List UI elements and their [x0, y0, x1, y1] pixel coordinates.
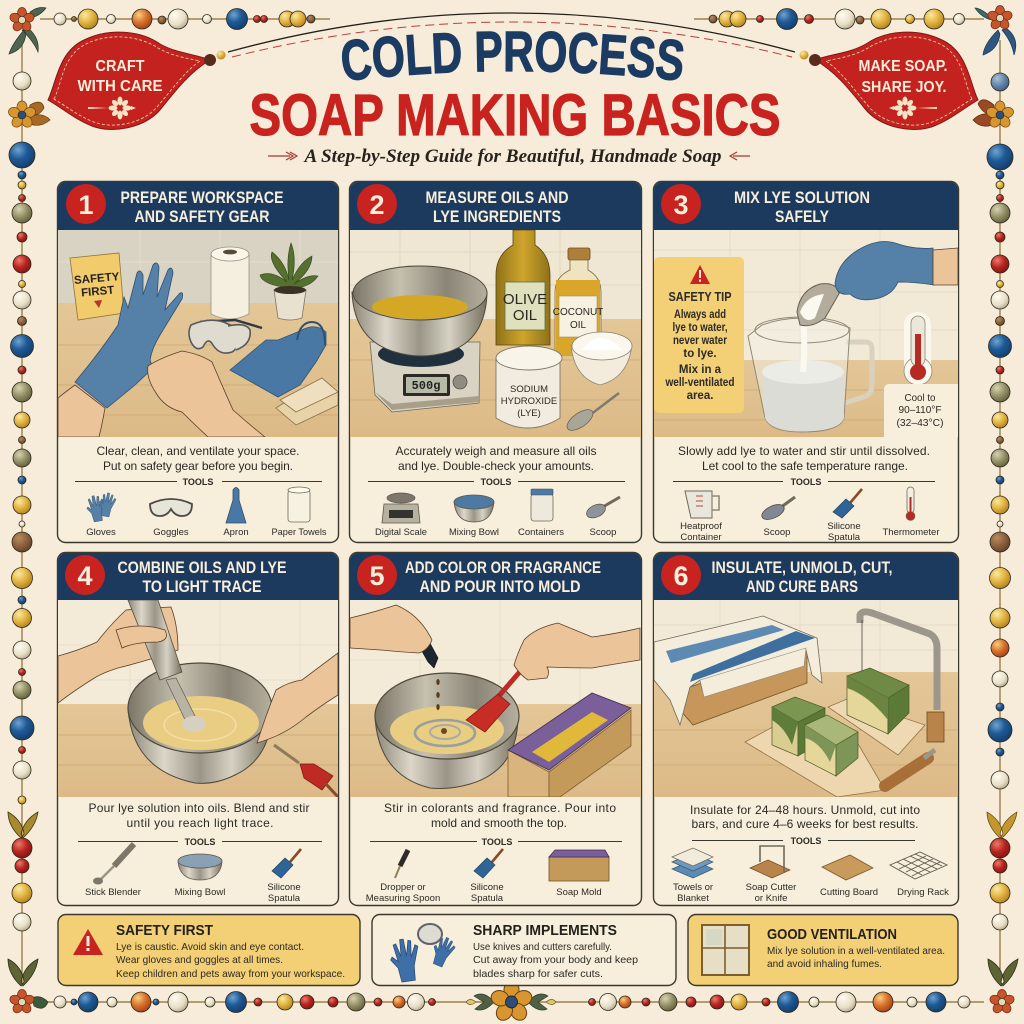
left hand	[350, 605, 432, 653]
border: left beads	[9, 40, 35, 985]
header 6	[654, 553, 958, 600]
header 1: PREPARE WORKSPACE	[120, 188, 284, 207]
header 4: 4	[77, 561, 93, 591]
apron	[230, 322, 326, 397]
olive oil bottle: OIL	[513, 307, 537, 324]
yellow safety tip box: Mix in a	[679, 364, 722, 376]
tool labels 2: Containers	[518, 527, 564, 538]
header 6: 6	[673, 561, 689, 591]
header 3: 3	[673, 190, 689, 220]
soap mold	[508, 693, 631, 797]
gloved hand	[75, 263, 183, 408]
stick blender	[128, 600, 206, 732]
tools heading 6: TOOLS	[791, 836, 821, 846]
steel bowl	[375, 673, 519, 788]
caption 4: Pour lye solution into oils. Blend and stir	[88, 801, 310, 815]
wooden box	[654, 647, 807, 725]
safety first sign: FIRST	[81, 285, 115, 299]
tool labels 2: Scoop	[590, 527, 616, 538]
banner: make soap share joy: MAKE SOAP.	[858, 58, 948, 75]
tool labels 2	[375, 527, 616, 538]
cutter base	[828, 699, 925, 755]
banner: craft with care	[48, 32, 226, 129]
tool labels 6: Drying Rack	[897, 887, 949, 898]
tools heading 1: TOOLS	[183, 477, 213, 487]
header 5: 5	[369, 561, 385, 591]
panel 5: add color	[350, 552, 642, 906]
header 3: SAFELY	[775, 207, 830, 226]
tool labels 2: Mixing Bowl	[449, 527, 499, 538]
window icon	[702, 925, 749, 975]
large soap bar	[847, 668, 909, 734]
caption 2: Accurately weigh and measure all oils	[396, 444, 596, 458]
illustration 5	[350, 600, 641, 797]
caption 1: Clear, clean, and ventilate your space.	[96, 444, 300, 458]
lye beaker: (LYE)	[517, 408, 541, 419]
warning text	[86, 922, 345, 980]
tool labels 3: Container	[680, 532, 722, 543]
plant	[260, 243, 318, 320]
tool labels 4: Silicone	[267, 882, 301, 893]
caption 5	[384, 801, 616, 830]
caption 4: until you reach light trace.	[126, 816, 274, 830]
measuring jug	[748, 317, 872, 432]
cutter arm	[860, 612, 944, 742]
yellow safety tip box: never water	[673, 335, 727, 347]
tool labels 2: Digital Scale	[375, 527, 427, 538]
illustration 4	[58, 600, 338, 797]
red spatula	[274, 745, 338, 797]
caption 2	[396, 444, 596, 473]
title: SOAP MAKING BASICS	[250, 83, 780, 148]
soap bar 3	[805, 715, 858, 776]
cutter icon	[750, 846, 790, 878]
soap mold icon	[549, 850, 609, 881]
forearm	[933, 248, 958, 285]
towels icon	[672, 848, 713, 878]
safety first sign	[70, 253, 124, 320]
tool labels 1: Paper Towels	[272, 527, 327, 538]
tool labels 1: Goggles	[153, 527, 189, 538]
caption 2: and lye. Double-check your amounts.	[398, 459, 594, 473]
panel 6: insulate	[654, 552, 958, 906]
yellow safety tip box	[654, 257, 744, 413]
goggles	[189, 320, 262, 353]
tool labels 4	[85, 882, 301, 904]
panel 2: measure oils	[350, 182, 642, 542]
warning triangle	[73, 929, 103, 955]
header 4	[58, 553, 338, 600]
drops	[436, 679, 440, 710]
header 5	[350, 553, 641, 600]
tool labels 5: Measuring Spoon	[366, 893, 440, 904]
tool labels 6: Towels or	[673, 882, 713, 893]
small bowl of coconut oil	[571, 332, 632, 385]
header 3	[654, 182, 958, 230]
towel icon	[288, 487, 310, 522]
caption 6	[690, 803, 920, 831]
tools heading 3: TOOLS	[791, 477, 821, 487]
ventilation text: and avoid inhaling fumes.	[767, 958, 882, 970]
header 1	[58, 182, 338, 230]
thermometer	[904, 312, 932, 385]
thermometer	[906, 487, 915, 520]
bowl icon	[178, 854, 222, 880]
tool labels 6: Blanket	[677, 893, 709, 904]
cool temp box: (32–43°C)	[896, 417, 944, 429]
tool labels 5: Soap Mold	[556, 887, 602, 898]
apron icon	[226, 488, 246, 523]
tool labels 5: Dropper or	[380, 882, 426, 893]
ventilation text: GOOD VENTILATION	[767, 926, 897, 943]
digital scale: 500g	[412, 379, 440, 393]
header 4: TO LIGHT TRACE	[142, 577, 262, 596]
stick blender icon	[93, 844, 134, 884]
sharp text: Cut away from your body and keep	[473, 954, 638, 966]
lye beaker	[496, 346, 562, 428]
header 5: ADD COLOR OR FRAGRANCE	[405, 558, 601, 577]
digital scale	[370, 341, 480, 412]
tool labels 3: Thermometer	[882, 527, 940, 538]
tool labels 3: Spatula	[828, 532, 861, 543]
sharp text: SHARP IMPLEMENTS	[473, 922, 617, 939]
tools heading 5: TOOLS	[482, 837, 512, 847]
gloved hand	[835, 242, 934, 300]
header 6: AND CURE BARS	[746, 577, 858, 596]
panel 1: prepare workspace	[58, 182, 338, 542]
warning text: Keep children and pets away from your workspace.	[116, 968, 345, 980]
header 1: 1	[78, 190, 94, 220]
sharp text: blades sharp for safer cuts.	[473, 968, 603, 980]
banner: make soap share joy: SHARE JOY.	[862, 79, 946, 96]
tools heading 4: TOOLS	[185, 837, 215, 847]
ventilation text: Mix lye solution in a well-ventilated area.	[767, 945, 945, 957]
tool labels 6: Soap Cutter	[746, 882, 796, 893]
board	[745, 715, 885, 797]
subtitle: A Step-by-Step Guide for Beautiful, Handmade Soap	[303, 147, 722, 167]
board icon	[822, 855, 873, 880]
lye beaker: HYDROXIDE	[501, 396, 557, 407]
header 2: MEASURE OILS AND	[426, 188, 568, 207]
tool labels 5	[366, 882, 602, 904]
sharp text: Use knives and cutters carefully.	[473, 941, 612, 953]
header 4: COMBINE OILS AND LYE	[118, 558, 286, 577]
header 2: 2	[369, 190, 385, 220]
caption 5: mold and smooth the top.	[431, 816, 567, 830]
header 6: INSULATE, UNMOLD, CUT,	[712, 558, 892, 577]
gloves and goggles icon	[388, 924, 457, 983]
ventilation text	[767, 926, 945, 970]
scoop	[564, 393, 619, 434]
caption 6: Insulate for 24–48 hours. Unmold, cut into	[690, 803, 920, 817]
tool labels 3: Silicone	[827, 521, 861, 532]
caption 1: Put on safety gear before you begin.	[103, 459, 293, 473]
silicone spatula	[833, 489, 862, 518]
forearm	[58, 385, 105, 437]
border: right beads	[987, 40, 1013, 985]
yellow safety tip box: lye to water,	[672, 322, 728, 334]
tool labels 1	[86, 527, 327, 538]
tool labels 4: Stick Blender	[85, 887, 141, 898]
olive oil bottle	[496, 230, 550, 345]
border: top beads left	[40, 8, 330, 30]
safety first sign: SAFETY	[74, 271, 120, 287]
tool labels 3: Scoop	[764, 527, 790, 538]
tool labels 1: Gloves	[86, 527, 116, 538]
yellow safety tip box: area.	[687, 390, 713, 402]
callout: sharp implements	[372, 914, 676, 986]
tool labels 5: Spatula	[471, 893, 504, 904]
caption 5: Stir in colorants and fragrance. Pour into	[384, 801, 616, 815]
cool temp box: 90–110°F	[898, 404, 942, 416]
dropper icon	[395, 850, 408, 878]
yellow safety tip box: to lye.	[683, 348, 717, 360]
tools heading 2: TOOLS	[481, 477, 511, 487]
yellow safety tip box: SAFETY TIP	[668, 290, 732, 304]
sharp text	[473, 922, 638, 980]
steel bowl	[352, 266, 487, 356]
folded towels	[276, 378, 338, 425]
callout: safety first	[58, 914, 360, 986]
banner: craft with care: WITH CARE	[78, 78, 162, 95]
heatproof container	[685, 491, 719, 518]
warning text: Lye is caustic. Avoid skin and eye contact.	[116, 941, 304, 953]
tool icons 5	[395, 849, 609, 881]
tool labels 6: Cutting Board	[820, 887, 878, 898]
spatula icon	[272, 849, 301, 878]
tool icons 3	[685, 487, 915, 523]
pinching hand	[148, 351, 265, 437]
containers icon	[531, 489, 553, 521]
border: bottom beads	[40, 992, 984, 1012]
tool labels 6	[673, 882, 949, 904]
fingers	[116, 626, 166, 648]
coconut oil bottle: OIL	[570, 320, 586, 331]
scoop with lye	[796, 283, 840, 326]
right hand	[514, 623, 640, 680]
tool icons 1	[85, 487, 310, 523]
caption 6: bars, and cure 4–6 weeks for best results.	[692, 817, 918, 831]
panel 3: mix lye	[654, 182, 958, 543]
caption 4	[88, 801, 310, 830]
paper towel	[211, 247, 249, 319]
lye beaker: SODIUM	[510, 384, 548, 395]
banner string	[228, 13, 795, 57]
warning text: Wear gloves and goggles at all times.	[116, 954, 283, 966]
red spatula	[466, 630, 556, 732]
header 2: LYE INGREDIENTS	[433, 207, 561, 226]
caption 3	[678, 444, 930, 473]
coconut oil bottle: COCONUT	[553, 307, 603, 318]
tool labels 3: Heatproof	[680, 521, 722, 532]
coconut oil bottle	[553, 248, 603, 355]
illustration 1	[58, 230, 338, 437]
tool labels 6: or Knife	[755, 893, 787, 904]
header 5: AND POUR INTO MOLD	[420, 577, 580, 596]
banner: craft with care: CRAFT	[96, 58, 145, 75]
right hand	[257, 653, 338, 743]
scale icon	[382, 493, 420, 523]
rack icon	[890, 852, 947, 879]
scoop icon	[584, 497, 620, 521]
steel bowl	[128, 663, 272, 783]
warning text: SAFETY FIRST	[116, 922, 213, 939]
cool temp box: Cool to	[904, 392, 936, 404]
title: COLD PROCESS	[342, 31, 684, 80]
tool labels 5: Silicone	[470, 882, 504, 893]
yellow safety tip box: well-ventilated	[665, 377, 734, 389]
caption 3: Let cool to the safe temperature range.	[702, 459, 908, 473]
olive oil bottle: OLIVE	[503, 291, 547, 308]
callout: good ventilation	[688, 914, 958, 986]
knife handle	[885, 750, 935, 786]
yellow safety tip box: Always add	[674, 309, 726, 321]
powder stream	[802, 308, 804, 372]
gloves	[85, 492, 117, 523]
illustration 3	[654, 230, 958, 437]
tool icons 6	[672, 846, 947, 880]
tool labels 4: Mixing Bowl	[175, 887, 225, 898]
tool icons 4	[93, 844, 301, 884]
scoop	[760, 497, 795, 523]
goggles icon	[150, 499, 192, 516]
header 3: MIX LYE SOLUTION	[734, 188, 870, 207]
caption 1	[96, 444, 300, 473]
border: top beads right	[694, 8, 984, 30]
soap bar 2	[772, 697, 825, 756]
left hand	[58, 607, 178, 703]
header 1: AND SAFETY GEAR	[134, 207, 270, 226]
title	[250, 31, 780, 148]
cool temp box	[884, 384, 958, 437]
illustration 2	[350, 230, 641, 437]
tool icons 2	[382, 489, 620, 523]
header 2	[350, 182, 641, 230]
spatula icon	[474, 849, 503, 878]
towel	[654, 616, 822, 725]
panel 4: combine	[58, 552, 338, 906]
illustration 6	[654, 600, 958, 797]
bowl icon	[454, 495, 494, 522]
banner: make soap share joy	[800, 32, 978, 129]
caption 3: Slowly add lye to water and stir until dissolved.	[678, 444, 930, 458]
tool labels 4: Spatula	[268, 893, 301, 904]
tool labels 1: Apron	[223, 527, 249, 538]
tool labels 3	[680, 521, 940, 543]
dropper	[414, 632, 438, 668]
